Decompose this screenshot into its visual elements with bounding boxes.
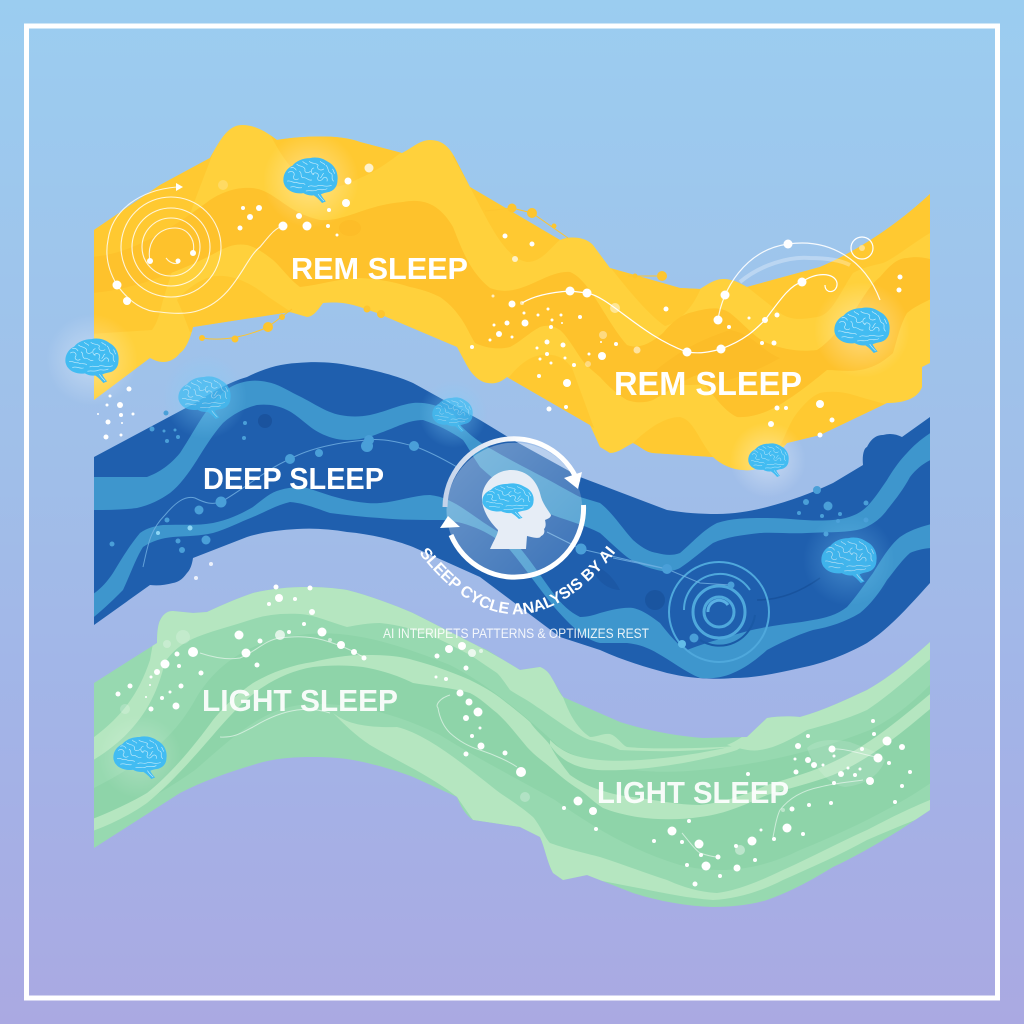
upper thin branch (550, 740, 740, 770)
faint blob (807, 740, 885, 787)
band: REM sleep (90, 120, 935, 475)
central AI cycle icon (440, 439, 584, 579)
particles: REM sleep (112, 164, 902, 438)
sonar rings (669, 562, 769, 662)
icon: brain, deep sleep top (432, 397, 473, 432)
icon: brain, deep sleep left (178, 376, 231, 419)
connecting lines (522, 237, 880, 353)
lower right light ribbon (333, 713, 935, 900)
data lines (143, 440, 731, 585)
band: deep sleep (90, 355, 935, 685)
heading: REM sleep left: REM SLEEP (291, 251, 468, 286)
arrowhead bottom (440, 516, 460, 528)
dark spots (258, 414, 272, 428)
lower light ribbon (90, 487, 935, 678)
particles: deep sleep (110, 410, 868, 648)
band: light sleep (90, 580, 935, 915)
arrowhead top (564, 472, 582, 489)
subtitle: AI INTERIPETS PATTERNS & OPTIMIZES REST (383, 626, 649, 641)
heading: light sleep left: LIGHT SLEEP (202, 683, 398, 718)
heading: light sleep right: LIGHT SLEEP (597, 775, 789, 810)
icon: brain, right REM (834, 307, 890, 353)
icon: brain in head (482, 483, 534, 519)
yellow node chains (200, 204, 666, 342)
middle light ribbon (90, 655, 935, 832)
concentric signal rings (107, 187, 283, 313)
top right light ribbon (727, 635, 935, 751)
thin curves (200, 637, 880, 857)
icon: brain, lower REM (748, 443, 789, 477)
head silhouette (482, 470, 551, 549)
icon: brain, light sleep (113, 736, 167, 779)
darker inner waves (90, 633, 935, 870)
curved caption: SLEEP CYCLE ANALYSIS BY AI (420, 546, 616, 614)
brain glows (46, 132, 910, 799)
heading: REM sleep right: REM SLEEP (614, 365, 802, 402)
cycle arc top (445, 439, 578, 507)
icon: brain, deep sleep right (821, 537, 877, 583)
particles: light sleep (116, 584, 912, 886)
icon: brain, left edge (65, 338, 119, 383)
glass disc (446, 443, 582, 579)
top light ribbon (90, 584, 737, 762)
arrowhead on ring (176, 183, 183, 191)
white particles near left of deep sleep (97, 386, 213, 580)
heading: deep sleep: DEEP SLEEP (203, 461, 384, 496)
icon: brain, top REM (283, 157, 338, 203)
upper light ribbon (90, 381, 935, 571)
cycle arc bottom (451, 505, 584, 577)
